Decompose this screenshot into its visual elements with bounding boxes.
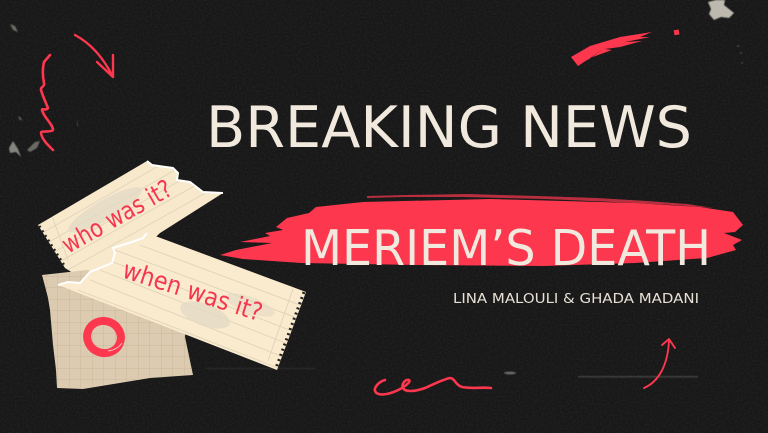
icon: red scribbled circle [83,316,125,358]
icon: red curved arrow down [75,35,113,77]
graph paper note with red circle [42,270,193,389]
icon: red squiggle bottom [375,378,491,394]
subtitle: MERIEM’S DEATH [301,220,711,277]
torn note: who was it? [38,160,224,272]
icon: red curved arrow up [644,339,675,388]
authors: LINA MALOULI & GHADA MADANI [453,292,699,307]
icon: red brush dash top right [571,30,679,66]
note text: who was it? [57,174,177,259]
torn note: when was it? [58,233,306,370]
red brush stroke behind subtitle [220,194,743,266]
note text: when was it? [119,255,266,327]
icon: red squiggle left [41,55,53,150]
title: BREAKING NEWS [206,95,692,161]
